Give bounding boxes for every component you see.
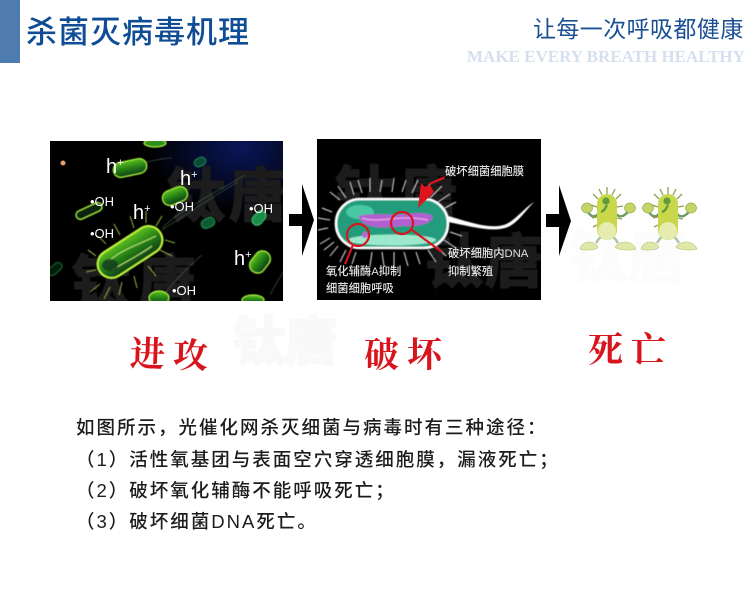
diagram labels xyxy=(326,164,529,295)
panel: damaged bacterium diagram: 钛 xyxy=(335,162,393,227)
english slogan: MAKE EVERY BREATH HEALTHY xyxy=(467,47,745,66)
panel: bacteria under attack: 钛 xyxy=(167,164,225,229)
labels h+ and OH: h xyxy=(133,202,144,224)
arrow: damage to death xyxy=(546,185,571,256)
diagram labels: 破坏细菌细胞膜 xyxy=(445,164,524,178)
labels h+ and OH: + xyxy=(191,169,198,181)
labels h+ and OH xyxy=(90,156,273,298)
diagram labels: 细菌细胞呼吸 xyxy=(326,282,394,295)
panel: bacteria under attack xyxy=(50,141,283,301)
caption: death: 死亡 xyxy=(588,323,674,373)
header accent bar xyxy=(0,0,20,63)
flagella xyxy=(143,158,283,295)
labels h+ and OH: •OH xyxy=(90,226,114,241)
explanation text: （3）破坏细菌DNA死亡。 xyxy=(76,511,318,532)
diagram labels: 破坏细胞内DNA xyxy=(448,246,529,260)
arrow: attack to damage xyxy=(289,184,314,256)
red callouts xyxy=(345,212,442,264)
labels h+ and OH: h xyxy=(106,156,117,178)
labels h+ and OH: + xyxy=(117,157,124,169)
title: 杀菌灭病毒机理 xyxy=(26,15,250,50)
slogan: 让每一次呼吸都健康 xyxy=(533,16,744,42)
explanation text: （1）活性氧基团与表面空穴穿透细胞膜，漏液死亡； xyxy=(76,449,560,470)
diagram labels: 抑制繁殖 xyxy=(448,264,493,278)
bacterium body xyxy=(336,199,448,248)
bacteria xyxy=(46,139,274,305)
panel: dead bacteria xyxy=(580,187,698,250)
labels h+ and OH: •OH xyxy=(249,201,273,216)
labels h+ and OH: h xyxy=(234,248,245,270)
labels h+ and OH: •OH xyxy=(172,283,196,298)
labels h+ and OH: •OH xyxy=(170,199,194,214)
DNA xyxy=(358,213,433,228)
explanation text: （2）破坏氧化辅酶不能呼吸死亡； xyxy=(76,480,396,501)
page watermark: 钛唐 xyxy=(233,314,337,372)
panel: damaged bacterium diagram: 钛 xyxy=(425,230,483,295)
panel: damaged bacterium diagram: 唐 xyxy=(400,162,458,227)
labels h+ and OH: + xyxy=(245,249,252,261)
caption: damage: 破坏 xyxy=(364,328,450,378)
explanation text xyxy=(76,417,560,532)
explanation text: 如图所示，光催化网杀灭细菌与病毒时有三种途径： xyxy=(76,417,548,438)
labels h+ and OH: •OH xyxy=(90,194,114,209)
diagram labels: 氧化辅酶A抑制 xyxy=(326,264,401,278)
pale watermark behind dead bacteria: 钛唐 xyxy=(570,225,686,290)
labels h+ and OH: h xyxy=(180,168,191,190)
cilia xyxy=(318,178,462,268)
caption: attack: 进攻 xyxy=(129,327,217,379)
panel: damaged bacterium diagram xyxy=(317,139,541,300)
flagellum xyxy=(448,202,534,229)
labels h+ and OH: + xyxy=(144,203,151,215)
